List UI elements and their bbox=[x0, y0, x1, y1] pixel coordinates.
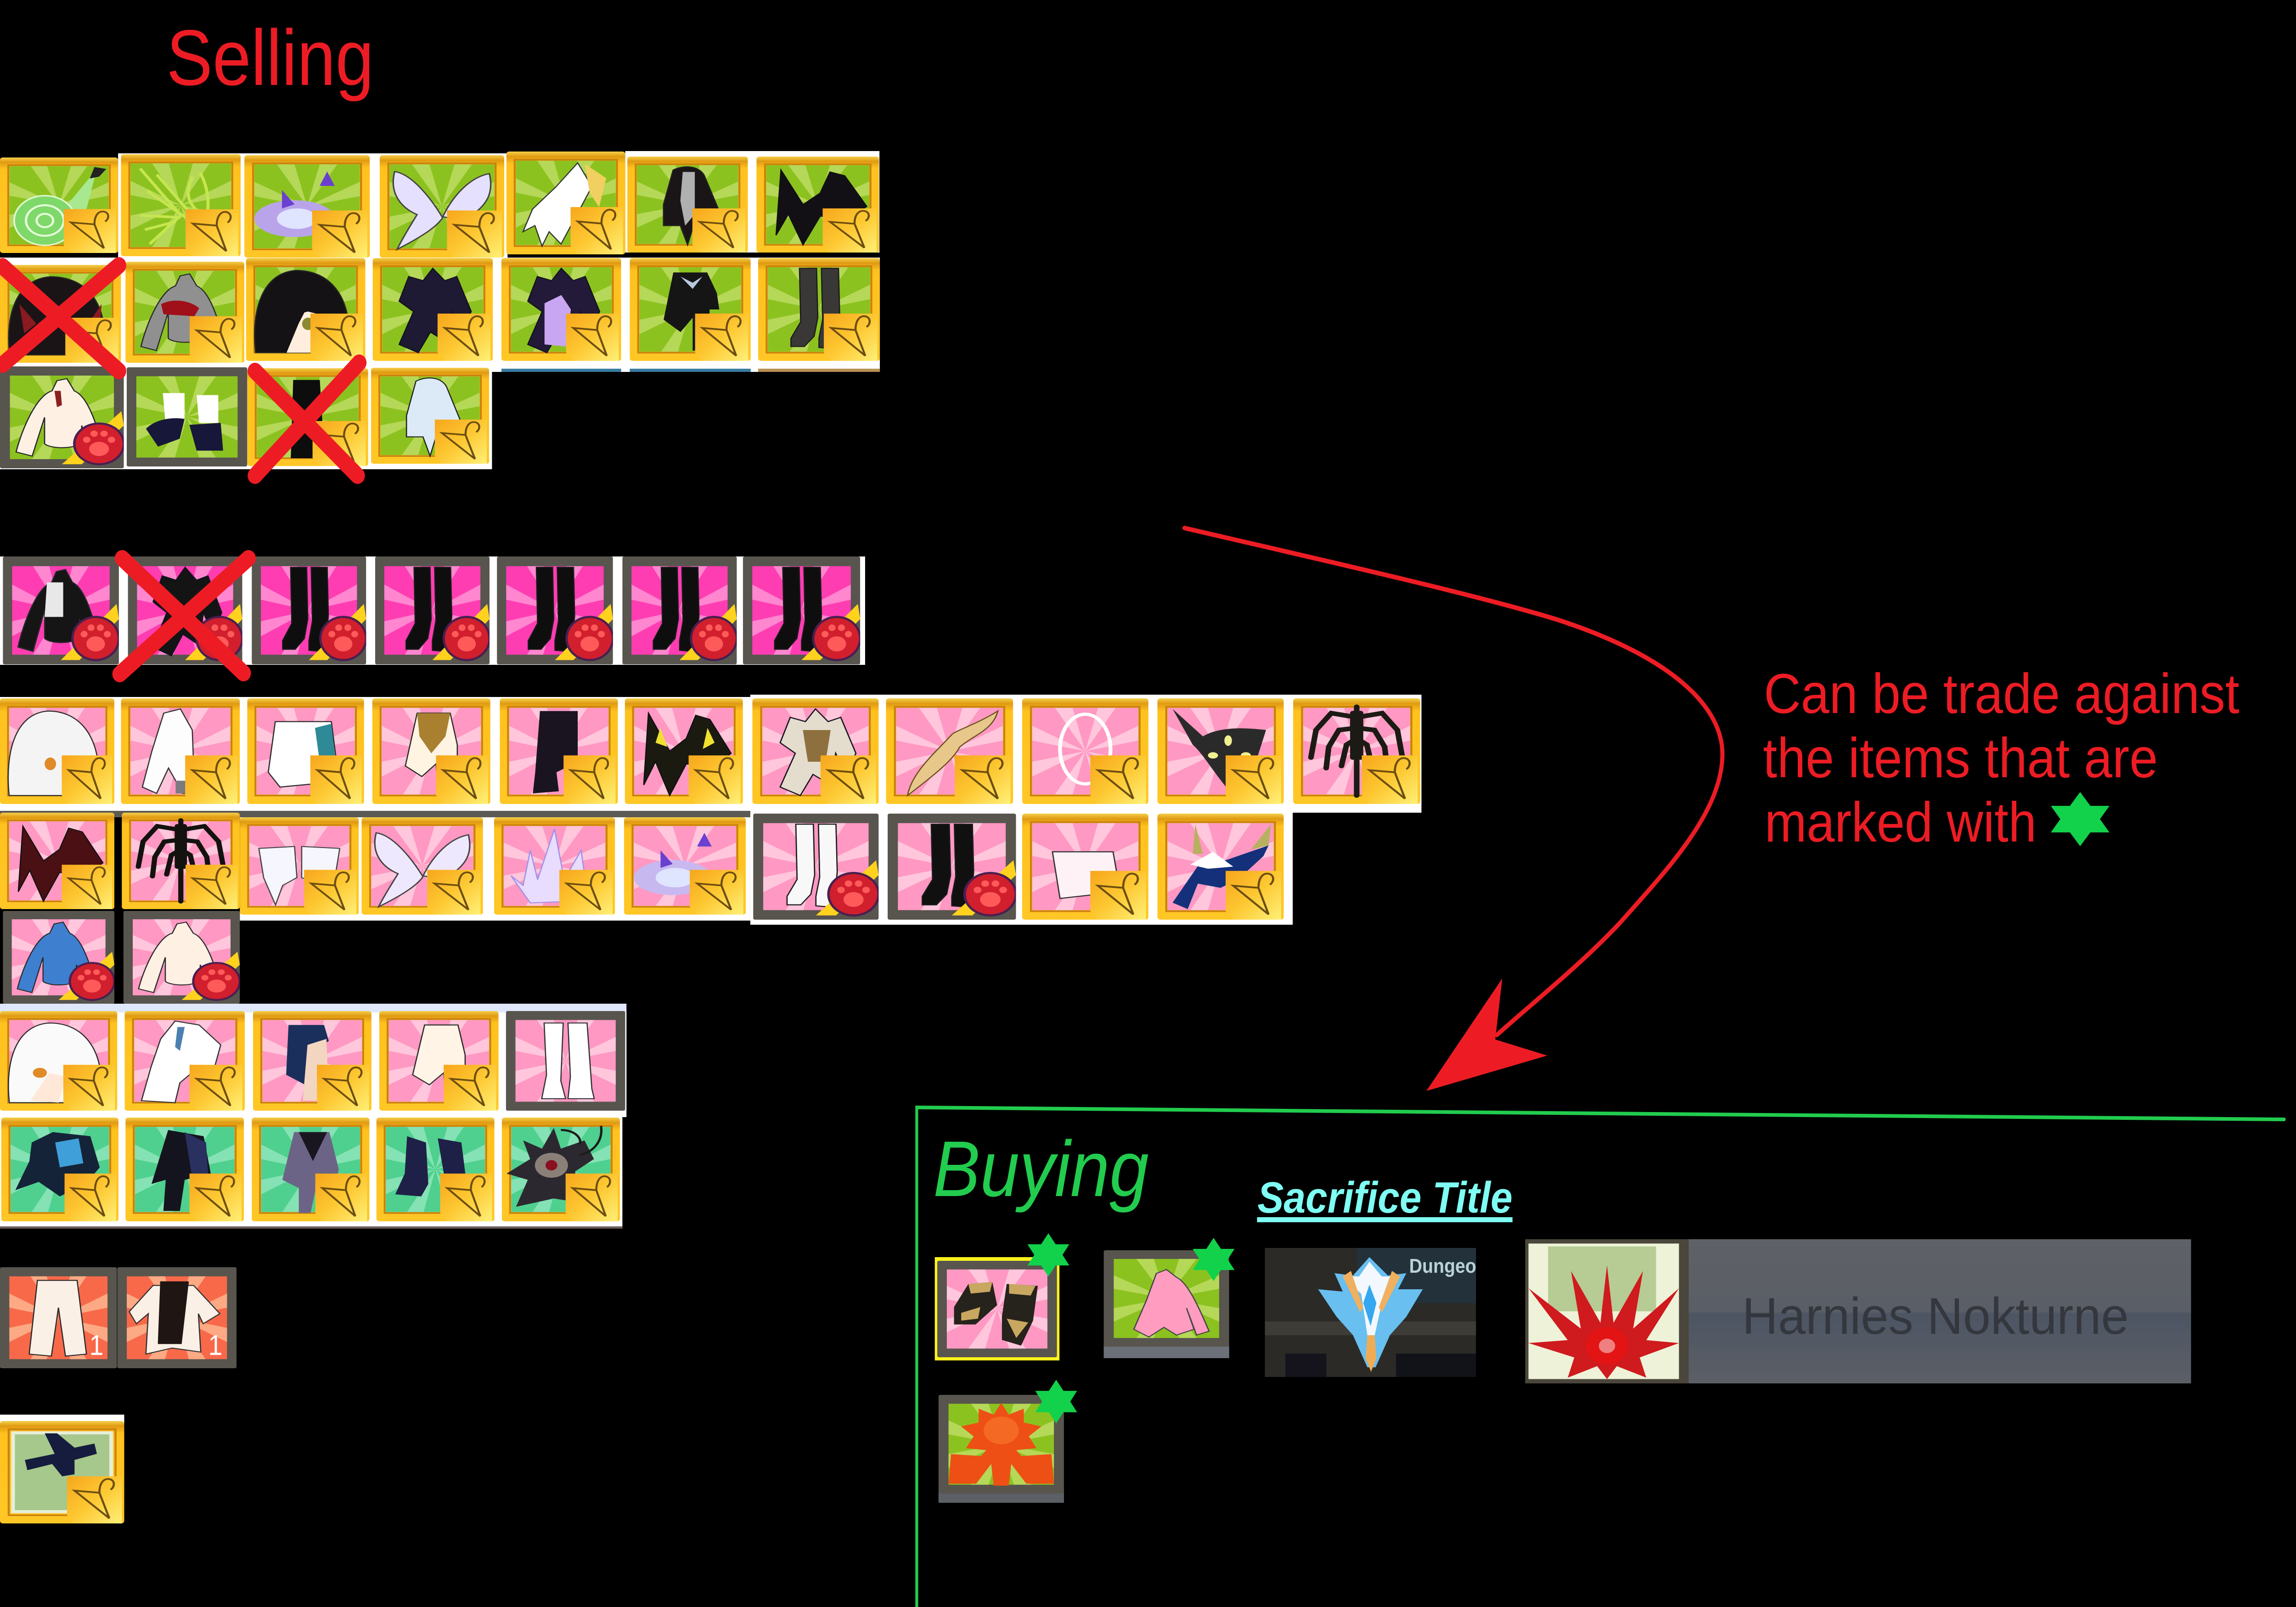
item: black spider wings 2 bbox=[122, 813, 240, 909]
cross mark: pink row bbox=[120, 558, 248, 674]
item: dark purple armor bbox=[373, 258, 493, 361]
text block: trade note: marked with bbox=[1765, 790, 2037, 854]
item: black hair with face bbox=[246, 258, 366, 361]
label: Harnies Nokturne: Harnies Nokturne bbox=[1742, 1288, 2129, 1345]
item: white plume wings bbox=[506, 152, 625, 254]
item: lilac spikes bbox=[494, 817, 615, 915]
item: orange sun on green bbox=[939, 1395, 1064, 1503]
item: white skirt bbox=[247, 698, 364, 804]
panel: hot pink stamped items bbox=[0, 556, 865, 665]
item: white-blue cape bbox=[371, 368, 489, 464]
item: white boots plain bbox=[506, 1011, 625, 1111]
item: black boots 3 bbox=[497, 556, 614, 664]
item: white jacket x1: 1 bbox=[208, 1330, 222, 1361]
text block: trade note: Can be trade against bbox=[1764, 662, 2240, 725]
item: crossed-out black top bbox=[128, 556, 243, 664]
item: grey boots bbox=[758, 258, 880, 361]
text block: trade note: the items that are bbox=[1763, 726, 2158, 789]
item: black spider wings bbox=[1293, 698, 1420, 804]
icon: sacrifice title emblem bbox=[1265, 1248, 1487, 1377]
item: white hair with face bbox=[0, 1011, 117, 1111]
item: white socks and black shoes bbox=[127, 367, 247, 466]
cross mark: first row two bbox=[2, 265, 119, 371]
cross mark: row three bbox=[255, 363, 359, 476]
item: white and gold armor bbox=[752, 698, 878, 804]
item: purple glove bbox=[252, 1118, 369, 1221]
heading: Buying: Buying bbox=[933, 1124, 1149, 1213]
item: lilac butterfly wings bbox=[380, 155, 504, 258]
panel: buying section bbox=[917, 1106, 2284, 1607]
item: navy winged cape bbox=[1158, 814, 1284, 920]
item: white ring bbox=[1022, 698, 1148, 804]
item: dark spiked emblem bbox=[502, 1118, 620, 1221]
item: white hair bbox=[0, 698, 114, 804]
item: navy long coat bbox=[125, 1118, 244, 1221]
item: tan ribbon bbox=[886, 698, 1013, 804]
item: grey top with red band bbox=[125, 262, 244, 363]
item: black boots 2 bbox=[375, 556, 491, 664]
item: cream glove with gold bbox=[372, 698, 490, 804]
item: dark cape bbox=[627, 157, 748, 253]
item: pale green dark cross accessory bbox=[0, 1415, 124, 1523]
panel: green item rows bbox=[0, 151, 880, 469]
item: dark red bat wings bbox=[0, 813, 114, 909]
icon: red burst bbox=[1525, 1239, 1689, 1383]
item: black top with white front bbox=[3, 556, 120, 664]
item: black boots with stamp bbox=[888, 814, 1017, 920]
item: pink blouse bbox=[1104, 1250, 1229, 1358]
panel: Harnies Nokturne item bbox=[1525, 1239, 2191, 1383]
marker: green star on orange item bbox=[1035, 1380, 1077, 1423]
item: green swirl bbox=[0, 157, 118, 253]
item: violet armor bbox=[501, 258, 621, 361]
icon: sacrifice title emblem: Dungeon bbox=[1409, 1254, 1487, 1277]
item: crossed-out black pants bbox=[247, 368, 368, 466]
item: blue armor bbox=[1, 1118, 118, 1221]
item: purple aura bbox=[244, 155, 370, 258]
item: black boots 5 bbox=[743, 556, 861, 664]
item: black and yellow spiked wings bbox=[625, 698, 743, 804]
item: dark mask bbox=[1158, 698, 1284, 804]
marker: green star on blouse bbox=[1193, 1238, 1234, 1281]
item: white coat bbox=[121, 698, 240, 804]
callout arrow: curved red arrow bbox=[1184, 528, 1722, 1091]
item: black and gold shoes bbox=[935, 1257, 1059, 1360]
item: white coat with blue tie bbox=[124, 1011, 245, 1111]
heading: Selling: Selling bbox=[166, 13, 374, 102]
item: tall black boots bbox=[500, 698, 618, 804]
item: green frond wings bbox=[121, 154, 241, 256]
panel: white and mint item rows bbox=[0, 1004, 626, 1229]
item: black boots 1 bbox=[252, 556, 367, 664]
text block: trade note bbox=[1763, 662, 2240, 854]
item: blue top with stamp bbox=[3, 911, 116, 1004]
item: black bat wings bbox=[756, 157, 879, 253]
panel: orange numbered items bbox=[0, 1267, 236, 1368]
item: white boots with stamp bbox=[753, 814, 880, 920]
icon: green star legend bbox=[2051, 792, 2110, 846]
item: cream glove bbox=[379, 1011, 499, 1111]
item: black boots 4 bbox=[622, 556, 738, 664]
item: pink-white skirt bbox=[1022, 814, 1148, 920]
heading: Sacrifice Title: Sacrifice Title bbox=[1257, 1174, 1513, 1222]
item: cream top with stamp bbox=[0, 366, 125, 468]
item: cream pants x1: 1 bbox=[90, 1330, 103, 1361]
item: navy hair cape bbox=[253, 1011, 371, 1111]
item: white jacket x1 bbox=[117, 1267, 236, 1368]
item: crossed-out dark hair bbox=[0, 265, 121, 363]
item: black top bbox=[630, 258, 751, 361]
item: navy boots bbox=[377, 1118, 495, 1221]
item: lilac butterfly wings pink bbox=[362, 817, 483, 915]
item: cream top with stamp bbox=[124, 911, 241, 1004]
item: white lace wings bbox=[240, 817, 359, 915]
panel: light pink item rows bbox=[0, 695, 1422, 1004]
item: cream pants x1 bbox=[0, 1267, 117, 1368]
marker: green star on shoes bbox=[1028, 1233, 1069, 1276]
item: purple aura pink bbox=[624, 817, 746, 915]
